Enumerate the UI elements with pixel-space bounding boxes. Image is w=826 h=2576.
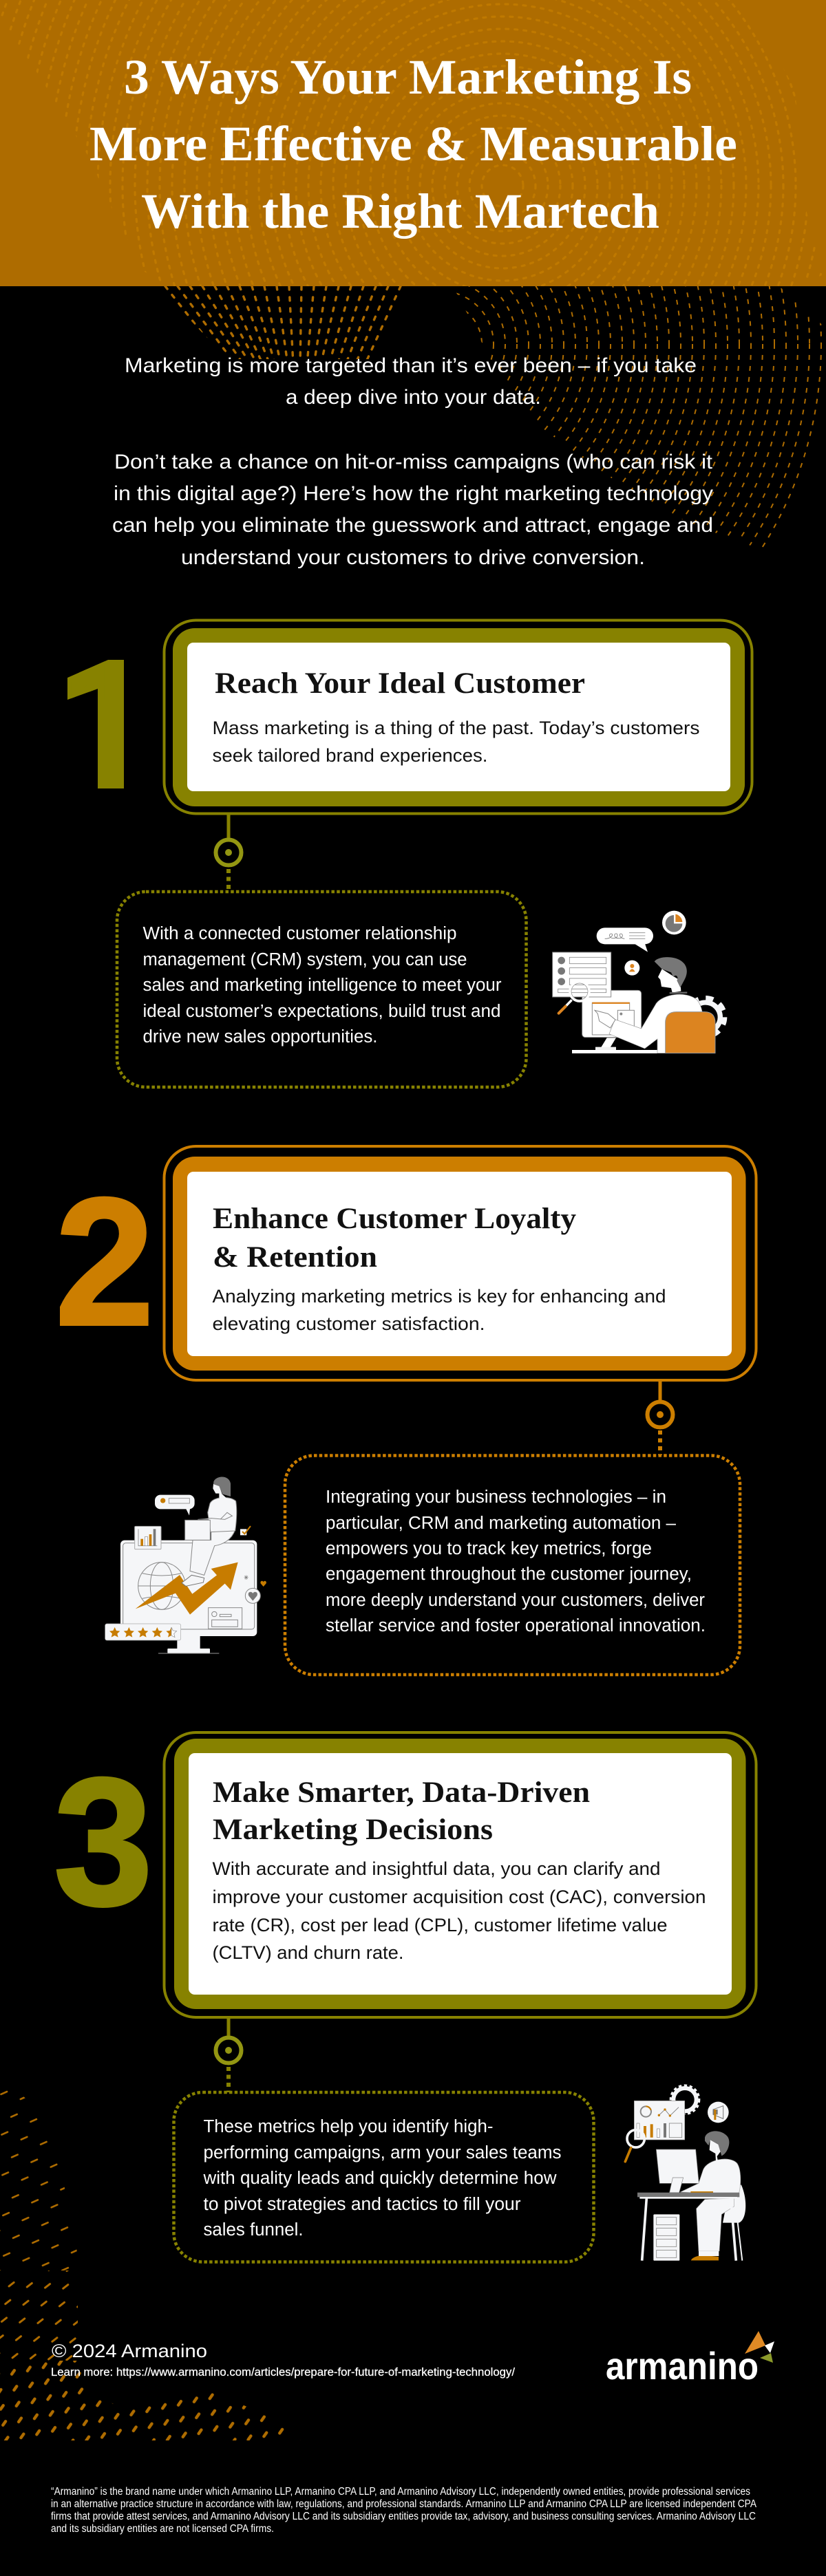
- panel: smarter decisions: With accurate and insightful data, you can clarify and: [212, 1858, 661, 1879]
- panel: reach your ideal customer: Reach Your Ideal Customer: [215, 667, 585, 700]
- panel: enhance loyalty: elevating customer satisfaction.: [212, 1313, 485, 1334]
- panel: technologies detail: particular, CRM and marketing automation –: [326, 1514, 677, 1533]
- section 3: [54, 1732, 756, 2262]
- section 2: [55, 1146, 756, 1675]
- panel: technologies detail: more deeply understand your customers, deliver: [326, 1591, 706, 1610]
- disclaimer: firms that provide attest services, and Armanino Advisory LLC and its subsidiary entities provide tax, advisory, and business consulting services. Armanino Advisory LLC: [51, 2511, 756, 2522]
- panel: CRM detail: [117, 892, 526, 1087]
- panel: reach your ideal customer: Mass marketing is a thing of the past. Today’s customers: [212, 718, 700, 738]
- panel: reach your ideal customer: seek tailored brand experiences.: [212, 745, 487, 766]
- panel: metrics detail: [173, 2092, 593, 2262]
- intro text: can help you eliminate the guesswork and attract, engage and: [112, 514, 713, 537]
- copyright: © 2024 Armanino: [52, 2341, 207, 2361]
- disclaimer: [51, 2486, 757, 2535]
- panel: CRM detail: With a connected customer relationship: [143, 924, 457, 943]
- number 2: 2: [55, 1160, 154, 1363]
- panel: metrics detail: These metrics help you identify high-: [204, 2117, 493, 2136]
- panel: technologies detail: stellar service and foster operational innovation.: [326, 1616, 706, 1635]
- panel: smarter decisions: improve your customer acquisition cost (CAC), conversion: [212, 1887, 706, 1907]
- panel: technologies detail: Integrating your business technologies – in: [326, 1488, 666, 1507]
- panel: reach your ideal customer: [164, 621, 752, 813]
- panel: technologies detail: empowers you to track key metrics, forge: [326, 1539, 652, 1558]
- panel: enhance loyalty: Analyzing marketing metrics is key for enhancing and: [212, 1286, 666, 1307]
- icon: woman on monitor with growth arrow: [105, 1477, 266, 1653]
- panel: CRM detail: management (CRM) system, you can use: [143, 950, 467, 969]
- icon: person at desk with dashboard: [625, 2085, 745, 2261]
- connector 1: [216, 815, 241, 892]
- intro text: understand your customers to drive conversion.: [181, 546, 645, 569]
- connector 3: [216, 2019, 241, 2092]
- title: [89, 50, 737, 239]
- title: More Effective & Measurable: [89, 116, 737, 171]
- panel: metrics detail: sales funnel.: [204, 2220, 303, 2240]
- disclaimer: and its subsidiary entities are not licensed CPA firms.: [51, 2523, 274, 2535]
- panel: CRM detail: sales and marketing intelligence to meet your: [143, 976, 502, 995]
- panel: smarter decisions: Make Smarter, Data-Driven: [213, 1777, 590, 1809]
- intro text: Don’t take a chance on hit-or-miss campaigns (who can risk it: [114, 451, 713, 473]
- panel: technologies detail: [285, 1456, 740, 1675]
- panel: smarter decisions: Marketing Decisions: [213, 1814, 493, 1846]
- panel: metrics detail: with quality leads and quickly determine how: [202, 2169, 557, 2188]
- panel: CRM detail: ideal customer’s expectations, build trust and: [143, 1002, 501, 1021]
- disclaimer: in an alternative practice structure in accordance with law, regulations, and professional standards. Armanino LLP and Armanino CPA LLP are licensed independent CPA: [51, 2498, 757, 2510]
- number 1: [67, 660, 124, 788]
- intro text: [112, 354, 713, 569]
- panel: technologies detail: engagement throughout the customer journey,: [326, 1565, 692, 1584]
- header band: [0, 0, 826, 286]
- title: 3 Ways Your Marketing Is: [124, 50, 692, 105]
- panel: CRM detail: drive new sales opportunities.: [143, 1027, 377, 1046]
- connector 2: [647, 1382, 673, 1455]
- panel: enhance loyalty: [164, 1146, 756, 1380]
- panel: smarter decisions: (CLTV) and churn rate.: [212, 1942, 403, 1963]
- number 3: 3: [54, 1740, 153, 1943]
- panel: smarter decisions: [164, 1732, 756, 2017]
- disclaimer: “Armanino” is the brand name under which Armanino LLP, Armanino CPA LLP, and Armanino Advisory LLC, independently owned entities, provide professional services: [51, 2486, 750, 2498]
- logo: armanino: armanino: [606, 2344, 759, 2387]
- intro text: Marketing is more targeted than it’s ever been – if you take: [125, 354, 697, 377]
- intro text: in this digital age?) Here’s how the right marketing technology: [114, 482, 713, 505]
- learn more link: Learn more: https://www.armanino.com/articles/prepare-for-future-of-marketing-technology/: [51, 2366, 515, 2379]
- panel: metrics detail: to pivot strategies and tactics to fill your: [204, 2195, 521, 2214]
- section 1: [63, 621, 752, 1087]
- title: With the Right Martech: [141, 184, 659, 239]
- panel: enhance loyalty: Enhance Customer Loyalty: [213, 1203, 577, 1235]
- icon: man at computer: [553, 911, 725, 1053]
- intro text: a deep dive into your data.: [286, 386, 541, 409]
- panel: metrics detail: performing campaigns, arm your sales teams: [204, 2143, 562, 2162]
- panel: enhance loyalty: & Retention: [213, 1241, 377, 1274]
- panel: smarter decisions: rate (CR), cost per lead (CPL), customer lifetime value: [212, 1915, 668, 1935]
- number 1: 1: [63, 621, 125, 828]
